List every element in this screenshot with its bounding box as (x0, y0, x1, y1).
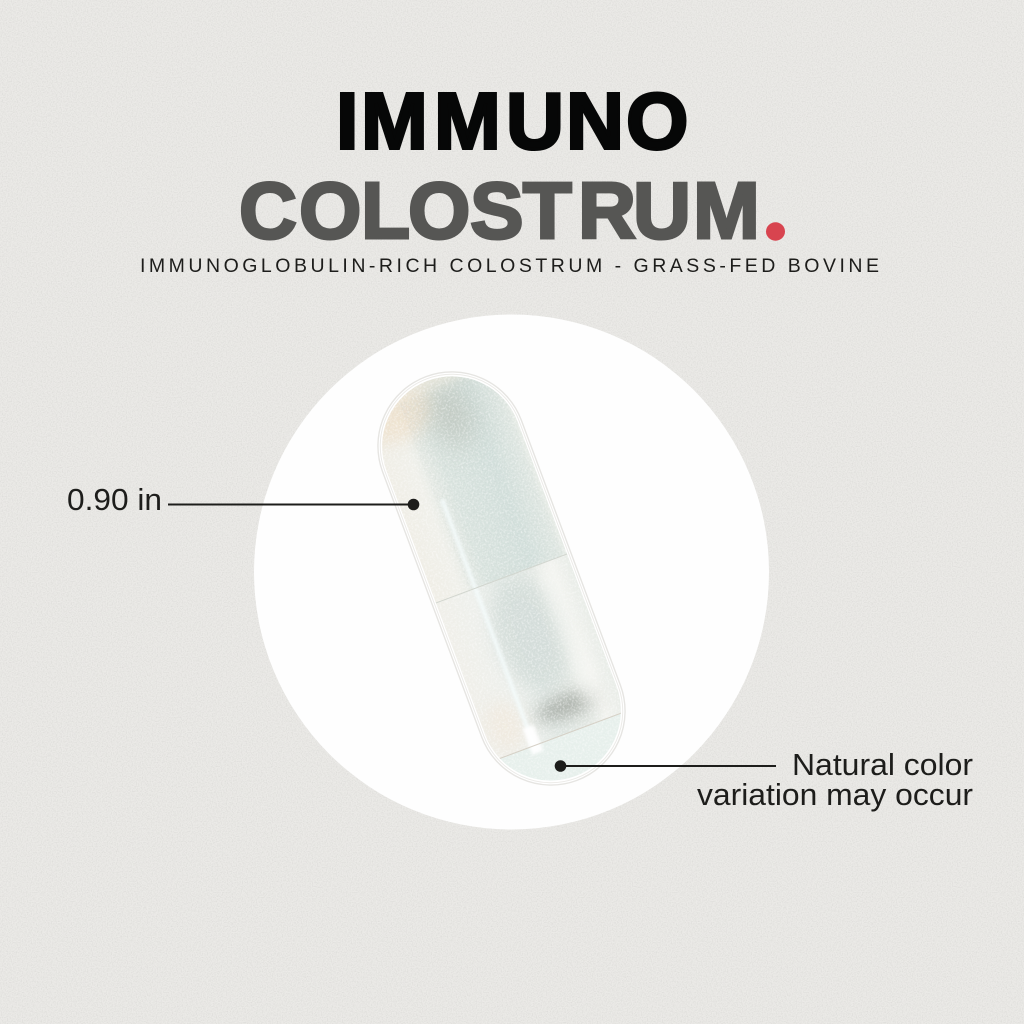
faded powder inside lower shell (491, 580, 566, 687)
label line 1: Natural color (792, 748, 973, 782)
white powder grain (382, 377, 620, 780)
label line 2: variation may occur (697, 778, 973, 812)
subtitle: IMMUNOGLOBULIN-RICH COLOSTRUM - GRASS-FED BOVINE (140, 255, 879, 277)
leader line (561, 765, 776, 767)
bright band lower right (541, 582, 597, 707)
white circle backdrop (254, 314, 769, 830)
red period (766, 222, 785, 241)
top shading (418, 383, 480, 450)
upper powder-filled shell (382, 376, 567, 602)
callout: colour variation (555, 748, 973, 812)
base seam line (500, 712, 621, 759)
warm tint lower left (492, 708, 520, 744)
pale aqua base cap (500, 714, 621, 780)
pale cream top edge (418, 376, 462, 390)
marker dot (408, 499, 419, 510)
callout: capsule length (67, 483, 419, 517)
warm tint on top cap (382, 392, 428, 446)
capsule outline (357, 351, 646, 806)
vertical light streak (441, 500, 528, 727)
title (239, 76, 785, 255)
title line: IMMUNO: IMMUNO (336, 76, 688, 166)
leader line (168, 504, 413, 506)
marker dot (555, 760, 566, 772)
seam line (434, 553, 569, 604)
dark powder grain (400, 392, 562, 584)
title line: COLOSTRUM: COLOSTRUM (239, 166, 760, 255)
capsule (377, 371, 626, 786)
capsule body (382, 376, 621, 780)
dark shadow near base (532, 684, 600, 727)
label: 0.90 in: 0.90 in (67, 483, 162, 517)
lower translucent shell (434, 553, 628, 761)
